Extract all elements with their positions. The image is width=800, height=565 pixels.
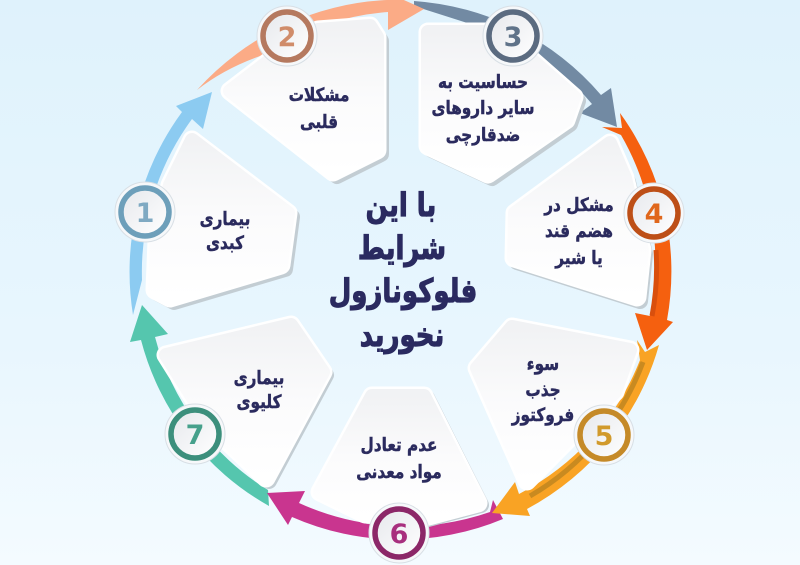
text: card 4 [543, 194, 614, 269]
text: card 3: حساسیت به [438, 71, 528, 92]
text: card 3: ضدقارچی [446, 124, 520, 146]
card 5: fructose malabsorption [477, 327, 630, 481]
arrow: segment 5 amber [492, 340, 659, 516]
text: card 7: بیماری [234, 367, 284, 388]
badge 6: 6 [390, 519, 408, 550]
arrow: segment 3 slate [414, 1, 617, 127]
text: card 6 [356, 434, 442, 483]
card 1: liver disease [155, 140, 292, 302]
arrow: segment 4 dark stripe [652, 250, 657, 316]
arrow: segment 7 teal [130, 305, 269, 506]
text: card 4: مشکل در [543, 194, 614, 215]
badge 4 [624, 183, 684, 243]
text: card 5 [511, 353, 574, 426]
text: card 6: عدم تعادل [361, 434, 437, 455]
text: card 1: کبدی [206, 232, 244, 253]
text: card 5: جذب [525, 379, 561, 400]
text: card 5: فروکتوز [511, 404, 574, 426]
text: card 2: مشکلات [289, 84, 349, 105]
badge 2: 2 [278, 22, 296, 53]
badge 6 [369, 503, 429, 563]
title: با این [366, 186, 436, 224]
text: card 1 [200, 208, 250, 253]
card 7: kidney disease [166, 325, 326, 481]
arrow: segment 1 blue [130, 92, 212, 315]
badge 7 [165, 404, 225, 464]
text: card 2: قلبی [300, 111, 338, 132]
badge 5 [574, 405, 634, 465]
badge 3: 3 [504, 22, 522, 53]
badge 1: 1 [136, 198, 154, 229]
title: نخورید [360, 316, 444, 354]
badge 4: 4 [645, 199, 663, 230]
text: card 4: یا شیر [554, 247, 603, 269]
title: شرایط [358, 229, 446, 267]
badge 1 [115, 182, 175, 242]
text: card 7: کلیوی [237, 391, 282, 413]
ring of arrows [130, 0, 673, 540]
card 6: mineral imbalance [320, 396, 481, 519]
card 4: lactose digestion [514, 143, 645, 301]
card 2: heart problems [230, 26, 381, 176]
arrow: segment 5 dark stripe [530, 362, 643, 496]
card 3: drug sensitivity [428, 32, 578, 178]
badge 5: 5 [595, 421, 613, 452]
arrow: segment 6 magenta [267, 491, 503, 540]
badge 2 [257, 6, 317, 66]
title [329, 186, 477, 354]
title: فلوکونازول [329, 272, 477, 310]
text: card 7 [234, 367, 284, 413]
badge 3 [483, 6, 543, 66]
badge 7: 7 [186, 420, 204, 451]
text: card 6: مواد معدنی [356, 461, 442, 483]
arrow: segment 4 orange [602, 113, 673, 350]
text: card 3: سایر داروهای [431, 97, 535, 119]
arrow: segment 2 salmon [197, 0, 424, 90]
text: card 1: بیماری [200, 208, 250, 229]
text: card 3 [431, 71, 535, 146]
text: card 2 [289, 84, 349, 132]
text: card 4: هضم قند [545, 220, 613, 241]
text: card 5: سوء [527, 353, 559, 375]
